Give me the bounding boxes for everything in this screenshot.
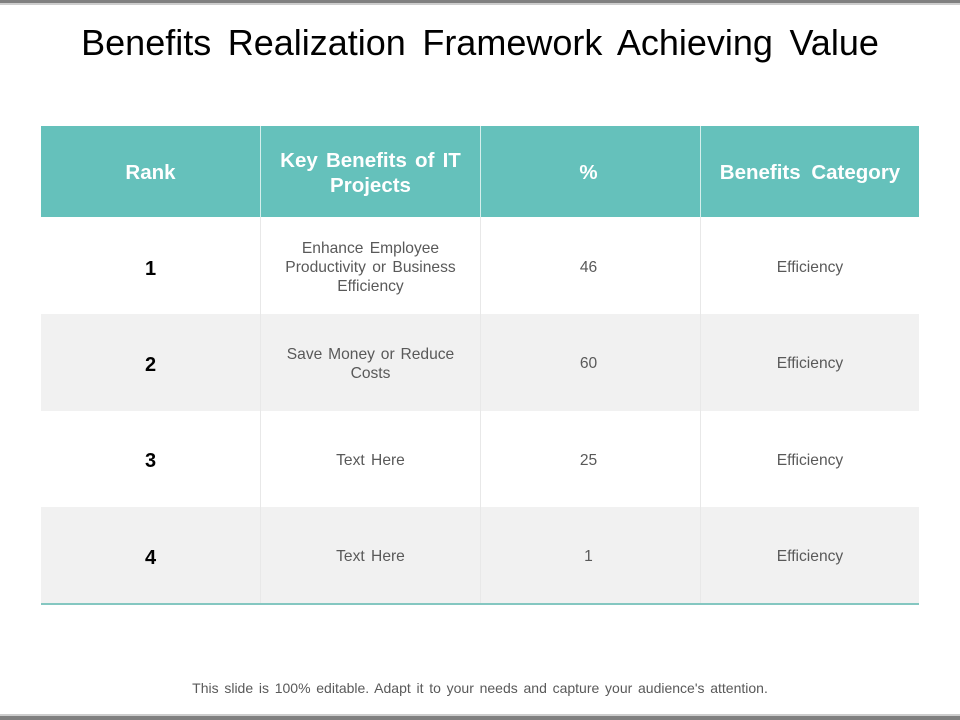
row 2 rank: 2 <box>145 354 156 376</box>
header: Key Benefits: Key Benefits of IT Projects <box>280 148 461 196</box>
row 1 category: Efficiency <box>777 259 843 276</box>
row 2 category: Efficiency <box>777 355 843 372</box>
top border <box>0 0 960 5</box>
bottom border <box>0 714 960 720</box>
row 4 category: Efficiency <box>777 548 843 564</box>
header: Rank: Rank <box>125 161 176 184</box>
row 4 benefit: Text Here <box>336 548 405 564</box>
row 1 percent: 46 <box>580 259 597 276</box>
row 4 rank: 4 <box>145 546 156 568</box>
row 1 benefit: Enhance Employee Productivity or Business Efficiency <box>285 240 456 295</box>
header: Rank <box>41 126 260 217</box>
footer note: This slide is 100% editable. Adapt it to your needs and capture your audience's attention. <box>192 680 768 696</box>
title: Benefits Realization Framework Achieving Value <box>81 22 879 63</box>
header: Benefits Category: Benefits Category <box>720 161 900 184</box>
row 3 percent: 25 <box>580 452 597 468</box>
row 4 percent: 1 <box>584 548 593 564</box>
row 1 rank: 1 <box>145 258 156 280</box>
row 2 background <box>41 314 919 411</box>
header: percent <box>479 126 698 217</box>
panel: table <box>41 126 919 605</box>
header: Key Benefits <box>261 126 480 217</box>
header: Benefits Category <box>701 126 919 217</box>
table header <box>41 126 919 217</box>
row 4 background <box>41 507 919 603</box>
row 3 benefit: Text Here <box>336 452 405 468</box>
row 3 rank: 3 <box>145 450 156 472</box>
header: percent: % <box>579 161 598 184</box>
row 3 category: Efficiency <box>777 452 843 468</box>
row 2 benefit: Save Money or Reduce Costs <box>287 346 454 382</box>
table bottom rule <box>41 603 919 605</box>
row 2 percent: 60 <box>580 355 597 372</box>
